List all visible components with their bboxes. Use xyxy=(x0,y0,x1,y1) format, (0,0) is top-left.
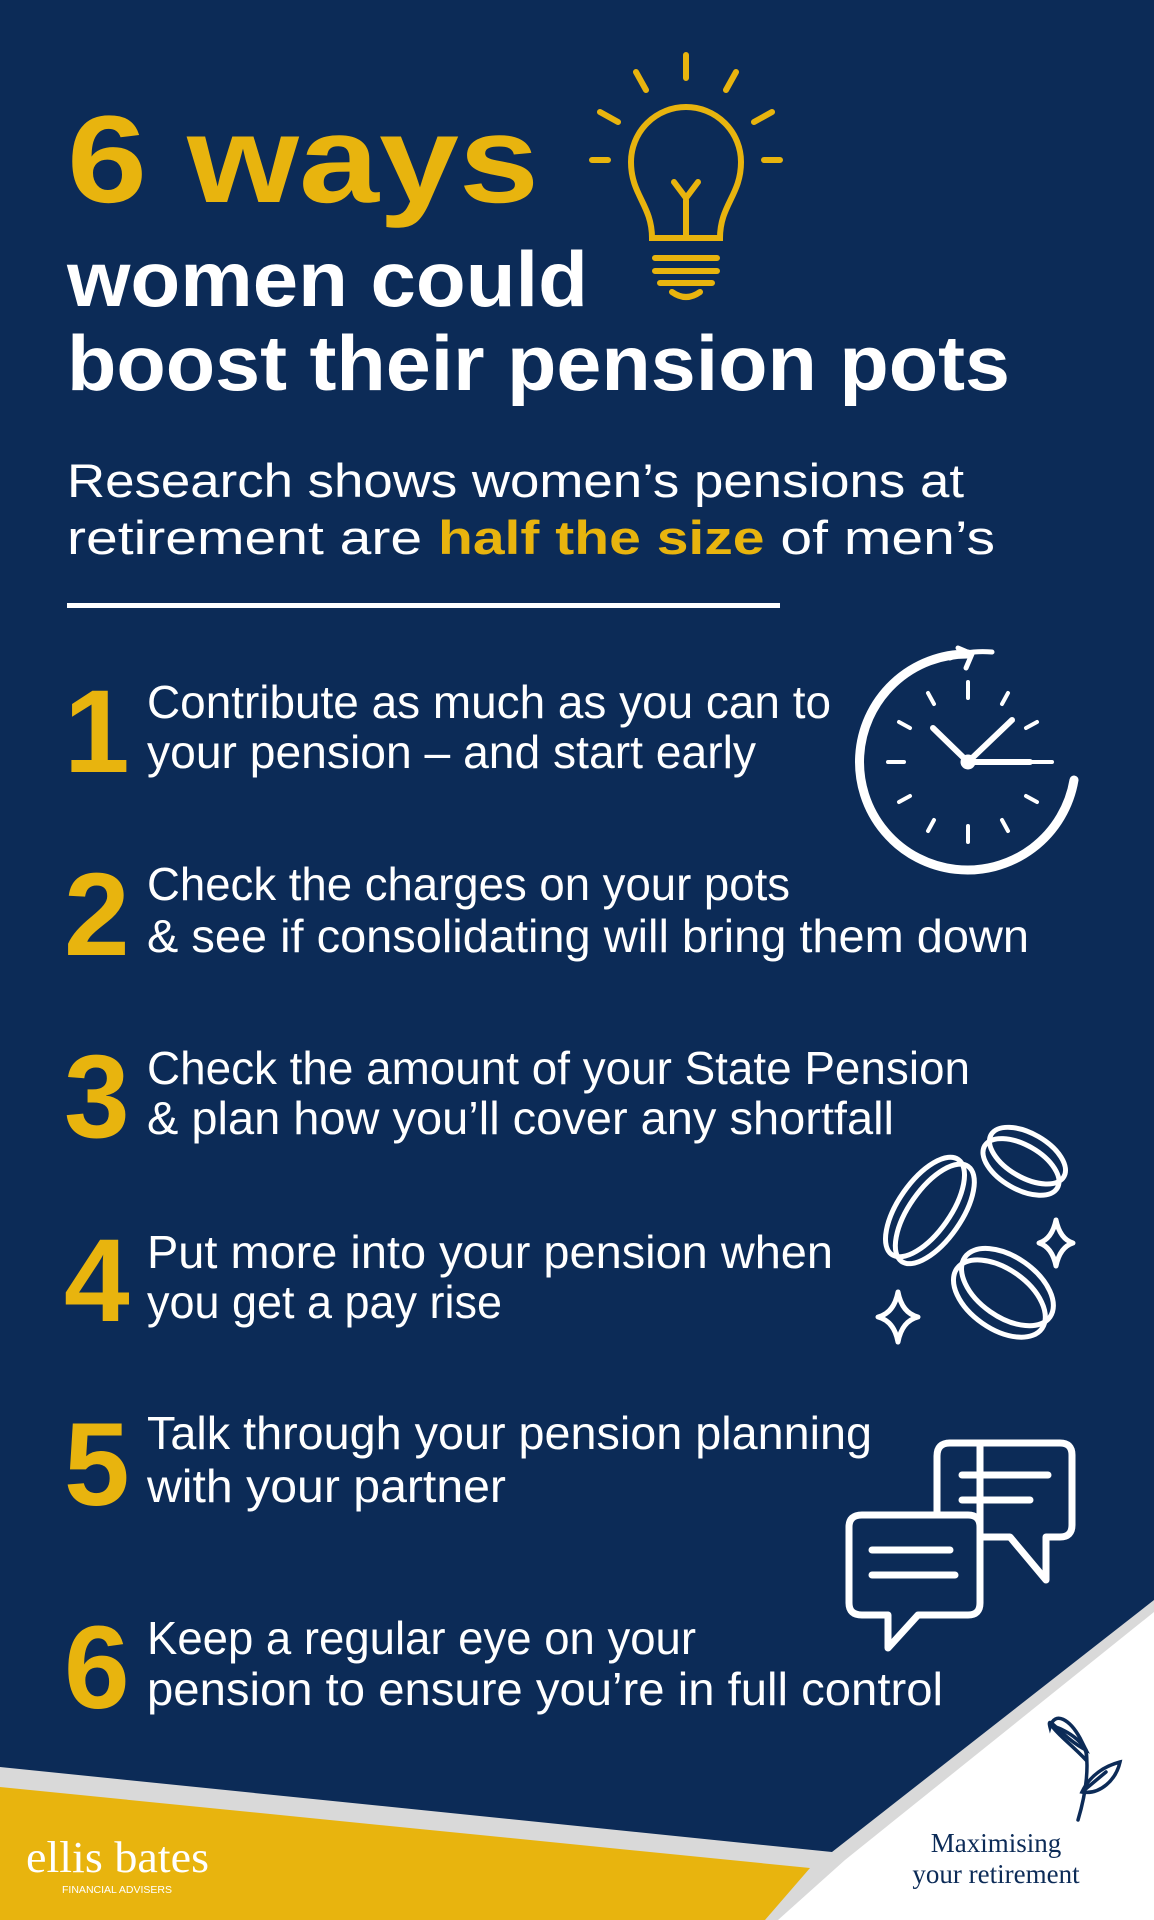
title: boost their pension pots xyxy=(67,319,1010,407)
item 4: 4 xyxy=(64,1215,130,1347)
item 3: 3 xyxy=(64,1031,130,1163)
item 4 xyxy=(64,1215,833,1347)
title: 6 ways xyxy=(67,91,539,229)
item 5: 5 xyxy=(64,1399,130,1531)
icon: coins xyxy=(870,1116,1075,1353)
subtitle: Research shows women’s pensions at xyxy=(67,454,964,507)
item 3: Check the amount of your State Pension xyxy=(147,1042,970,1094)
item 3 xyxy=(64,1031,970,1163)
item 4: Put more into your pension when xyxy=(147,1226,833,1278)
item 5: with your partner xyxy=(146,1460,506,1512)
item 3: & plan how you’ll cover any shortfall xyxy=(147,1092,894,1144)
tagline: Maximising your retirement xyxy=(912,1828,1080,1889)
subtitle: retirement are half the size of men’s xyxy=(67,511,995,564)
item 6 xyxy=(64,1602,943,1734)
item 6: pension to ensure you’re in full control xyxy=(147,1663,943,1715)
icon: clock xyxy=(860,648,1074,870)
item 1: 1 xyxy=(64,666,130,798)
item 2: Check the charges on your pots xyxy=(147,858,790,910)
item 1: your pension – and start early xyxy=(147,726,756,778)
item 1: Contribute as much as you can to xyxy=(147,676,831,728)
logo: ellis bates: FINANCIAL ADVISERS xyxy=(62,1885,172,1896)
tagline: Maximising your retirement: your retirement xyxy=(912,1859,1080,1889)
item 2: & see if consolidating will bring them down xyxy=(147,910,1029,962)
icon: plant xyxy=(1049,1718,1120,1820)
item 6: Keep a regular eye on your xyxy=(147,1612,696,1664)
subtitle xyxy=(67,454,995,564)
item 6: 6 xyxy=(64,1602,130,1734)
item 5 xyxy=(64,1399,872,1531)
icon: chat bubbles xyxy=(849,1443,1072,1648)
logo: ellis bates: ellis bates xyxy=(26,1833,209,1882)
item 4: you get a pay rise xyxy=(147,1276,502,1328)
tagline: Maximising your retirement: Maximising xyxy=(931,1828,1061,1858)
icon: lightbulb xyxy=(592,55,780,297)
item 2: 2 xyxy=(64,849,130,981)
title: women could xyxy=(66,235,588,323)
item 1 xyxy=(64,666,831,798)
item 5: Talk through your pension planning xyxy=(147,1407,872,1459)
title xyxy=(66,91,1010,407)
item 2 xyxy=(64,849,1029,981)
